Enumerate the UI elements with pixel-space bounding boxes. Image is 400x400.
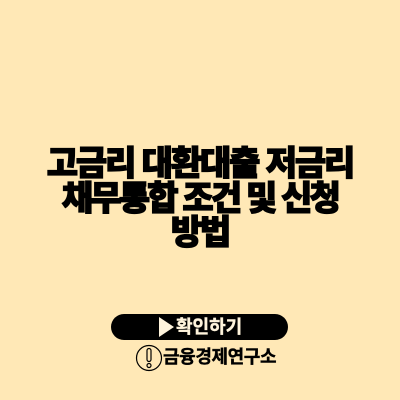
button: confirm [111,314,288,340]
title: 방법 [171,214,229,252]
source logo [136,344,276,372]
title: 채무통합 조건 및 신청 [62,180,338,218]
icon: play triangle [159,317,174,337]
button label: 확인하기 [176,317,242,337]
icon: exclamation circle [136,344,162,372]
title [47,145,353,252]
source name: 금융경제연구소 [163,347,276,367]
title: 고금리 대환대출 저금리 [47,145,353,183]
